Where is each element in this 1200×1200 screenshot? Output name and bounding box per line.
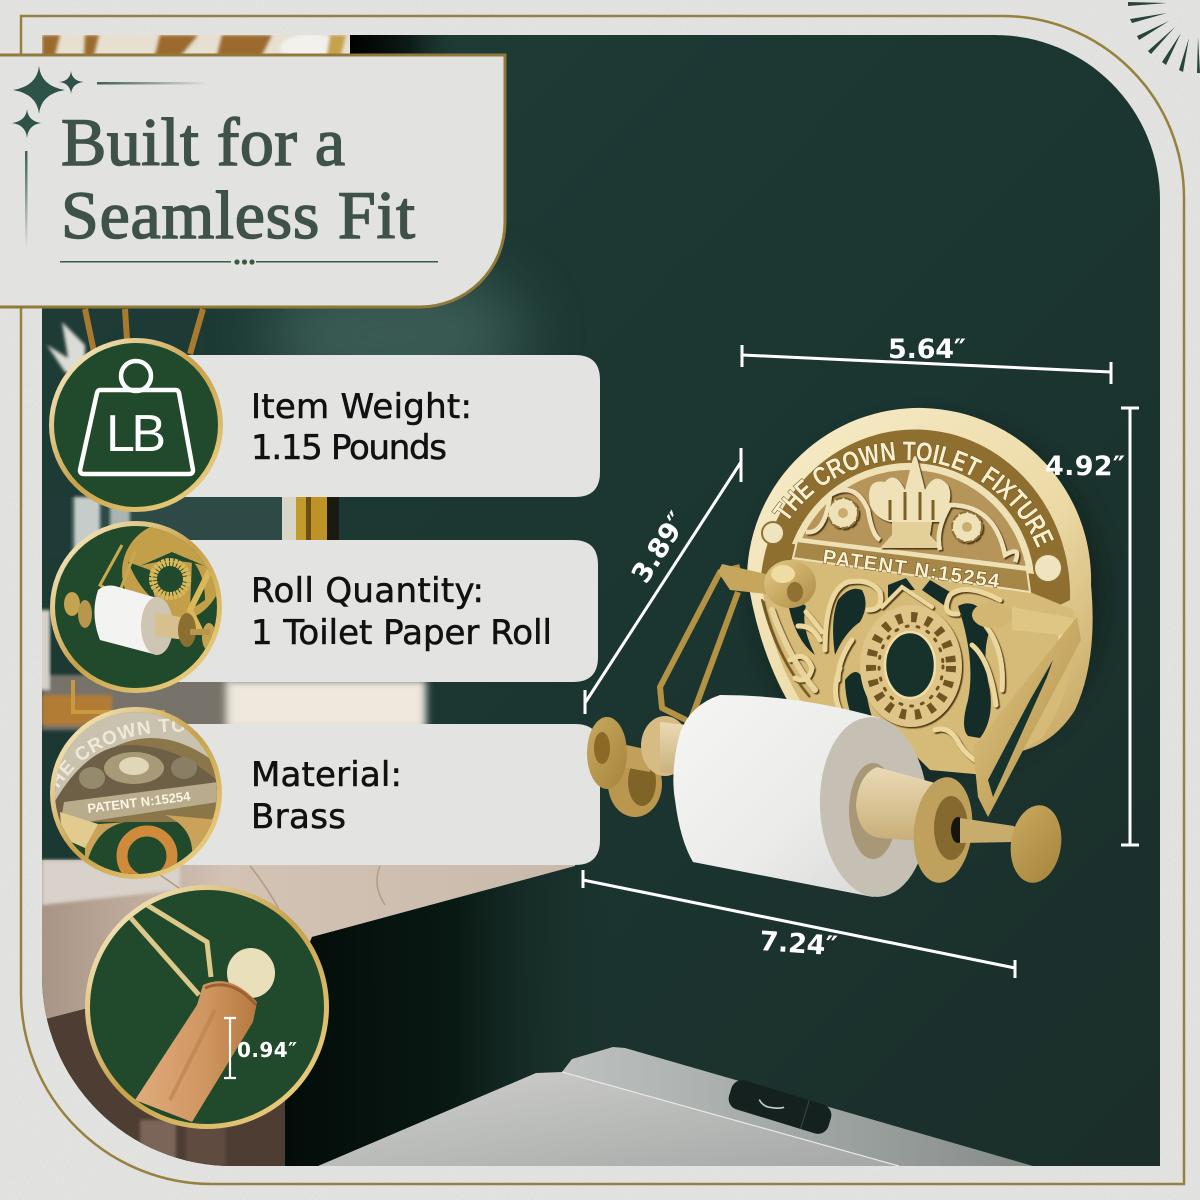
icon: brass close-up thumbnail: PATENT N:15254 — [87, 788, 192, 816]
rod dimension marker — [224, 1018, 236, 1078]
center ring — [860, 605, 962, 727]
heading text: Built for a — [61, 104, 345, 180]
patent bar: PATENT N:15254 — [821, 546, 1002, 593]
dark lettering band — [760, 429, 1070, 620]
panel: item weight — [130, 355, 600, 497]
dimension: width 5.64: 5.64″ — [888, 334, 966, 365]
toilet paper holder product — [587, 408, 1106, 897]
left arm bracket — [660, 560, 816, 722]
material text — [251, 755, 402, 837]
heading text: Seamless Fit — [61, 177, 415, 253]
dimension: length 7.24 — [583, 870, 1015, 978]
dimension: height 4.92: 4.92″ — [1045, 451, 1125, 482]
icon: weight badge — [49, 338, 223, 512]
icon: brass close-up thumbnail: THE CROWN TOIL — [55, 718, 189, 794]
dimension: height 4.92 — [1045, 408, 1139, 845]
panel: heading card — [0, 55, 505, 307]
right arm bracket — [972, 602, 1081, 817]
dimension: width 5.64 — [742, 334, 1111, 384]
wall light glow — [255, 271, 536, 355]
heading text — [61, 104, 415, 253]
room band behind roll row — [70, 494, 339, 552]
flowers and vines — [806, 490, 1017, 562]
screws — [762, 522, 1062, 582]
toilet tank — [318, 1047, 1033, 1166]
right spindle — [856, 767, 1066, 886]
patent bar — [793, 541, 1030, 593]
crown — [869, 456, 950, 548]
icon: flush button — [728, 1080, 832, 1134]
room band behind material row — [38, 610, 426, 730]
dimension: depth 3.89 — [585, 448, 741, 714]
roll quantity text — [251, 571, 552, 653]
dimension: depth 3.89: 3.89″ — [626, 507, 694, 589]
item weight text: Item Weight: — [251, 387, 472, 427]
brown cabinet — [42, 1000, 285, 1166]
upper-left gold stems and white flower — [47, 309, 203, 378]
marble counter — [42, 860, 575, 1020]
icon: rod diameter badge — [85, 885, 329, 1129]
icon: sunburst in top right corner — [1128, 2, 1200, 73]
panel: roll quantity — [130, 540, 598, 682]
item weight text: 1.15 Pounds — [251, 428, 447, 468]
panel: material — [130, 724, 600, 865]
heading underline with dots — [60, 259, 438, 265]
inner relief panel — [797, 466, 1030, 570]
openwork scrolls and leaves — [762, 581, 1062, 765]
icon: rod diameter badge: 0.94″ — [237, 1038, 297, 1062]
item weight text — [251, 387, 472, 468]
icon: brass close-up thumbnail — [50, 707, 222, 879]
openwork openings — [788, 578, 992, 738]
dark lower wall — [285, 866, 574, 1166]
roll quantity text: Roll Quantity: — [251, 571, 484, 611]
material text: Material: — [251, 755, 402, 795]
icon: weight badge: LB — [106, 405, 166, 463]
icon: holder thumbnail — [50, 521, 222, 693]
material text: Brass — [251, 797, 346, 837]
toilet paper roll — [673, 695, 933, 900]
top strip: flowers and dark wall — [42, 35, 436, 54]
roll quantity text: 1 Toilet Paper Roll — [251, 613, 552, 653]
icon: sparkles — [12, 66, 84, 138]
dimension: length 7.24: 7.24″ — [759, 926, 838, 962]
holder back plate — [747, 408, 1093, 774]
left spindle knobs — [587, 716, 700, 817]
plate lettering: THE CROWN TOILET FIXTURE — [771, 441, 1054, 548]
lower openwork base — [762, 558, 1075, 775]
